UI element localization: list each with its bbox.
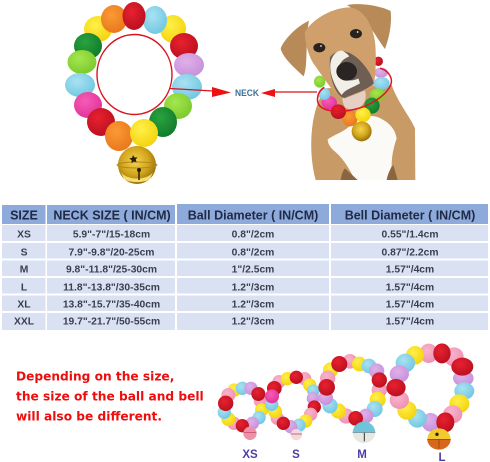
dog muzzle xyxy=(330,51,374,98)
table rows: 1.2"/3cm xyxy=(232,282,274,293)
neck ring annotation xyxy=(317,68,391,111)
neck label: NECK xyxy=(235,88,259,98)
collar L xyxy=(386,343,474,450)
dog nose xyxy=(336,62,357,81)
table rows: 1.57"/4cm xyxy=(386,300,434,311)
collar M xyxy=(318,354,387,443)
table rows: S xyxy=(21,247,28,258)
table rows: 11.8"-13.8"/30-35cm xyxy=(63,282,160,293)
table header: Ball Diameter ( IN/CM) xyxy=(188,208,318,222)
dog bell xyxy=(352,121,372,141)
table rows: 1"/2.5cm xyxy=(232,265,274,276)
dog chest patch xyxy=(328,116,397,180)
dog collar balls xyxy=(314,57,390,126)
dog eyes xyxy=(313,29,362,52)
table rows: 13.8"-15.7"/35-40cm xyxy=(63,300,160,311)
note text: the size of the ball and bell xyxy=(16,390,204,404)
icon: gold bell xyxy=(117,146,157,184)
table rows: 9.8"-11.8"/25-30cm xyxy=(66,265,157,276)
size table xyxy=(2,204,488,330)
note text: Depending on the size, xyxy=(16,370,174,384)
table rows: XXL xyxy=(14,317,34,328)
neck circle annotation xyxy=(97,34,172,114)
table rows: 1.57"/4cm xyxy=(386,282,434,293)
table rows: 1.57"/4cm xyxy=(386,317,434,328)
table rows: 1.2"/3cm xyxy=(232,300,274,311)
table header: NECK SIZE ( IN/CM) xyxy=(53,208,171,222)
table rows xyxy=(2,225,488,330)
size labels: XS xyxy=(242,449,258,461)
table rows: 5.9"-7"/15-18cm xyxy=(73,230,150,241)
dog ears xyxy=(281,21,309,76)
collar XS xyxy=(218,382,268,440)
large pom-pom collar xyxy=(65,2,204,184)
table rows: 0.8"/2cm xyxy=(232,247,274,258)
dog head xyxy=(305,7,376,98)
dog throat xyxy=(342,88,366,109)
table rows: 19.7"-21.7"/50-55cm xyxy=(63,317,160,328)
size labels: S xyxy=(292,449,300,461)
table rows: 7.9"-9.8"/20-25cm xyxy=(69,247,154,258)
table header xyxy=(2,204,488,224)
table rows: M xyxy=(20,265,28,276)
dog photo illustration xyxy=(281,4,415,180)
note text: will also be different. xyxy=(16,410,162,424)
arrow: dog neck to label xyxy=(261,89,317,97)
size labels xyxy=(242,449,446,462)
table rows: 0.55"/1.4cm xyxy=(382,230,438,241)
table rows: XS xyxy=(17,230,31,241)
table rows: L xyxy=(21,282,27,293)
note text xyxy=(16,370,204,424)
size comparison collars xyxy=(218,343,474,450)
table rows: 0.8"/2cm xyxy=(232,230,274,241)
size labels: M xyxy=(357,449,367,461)
table header: SIZE xyxy=(10,208,38,222)
table rows: XL xyxy=(17,300,31,311)
table header: Bell Diameter ( IN/CM) xyxy=(345,208,475,222)
collar S xyxy=(265,371,321,440)
table rows: 1.2"/3cm xyxy=(232,317,274,328)
table rows: 1.57"/4cm xyxy=(386,265,434,276)
table rows: 0.87"/2.2cm xyxy=(382,247,438,258)
dog body xyxy=(311,85,415,180)
arrow: collar to neck label xyxy=(170,87,231,97)
